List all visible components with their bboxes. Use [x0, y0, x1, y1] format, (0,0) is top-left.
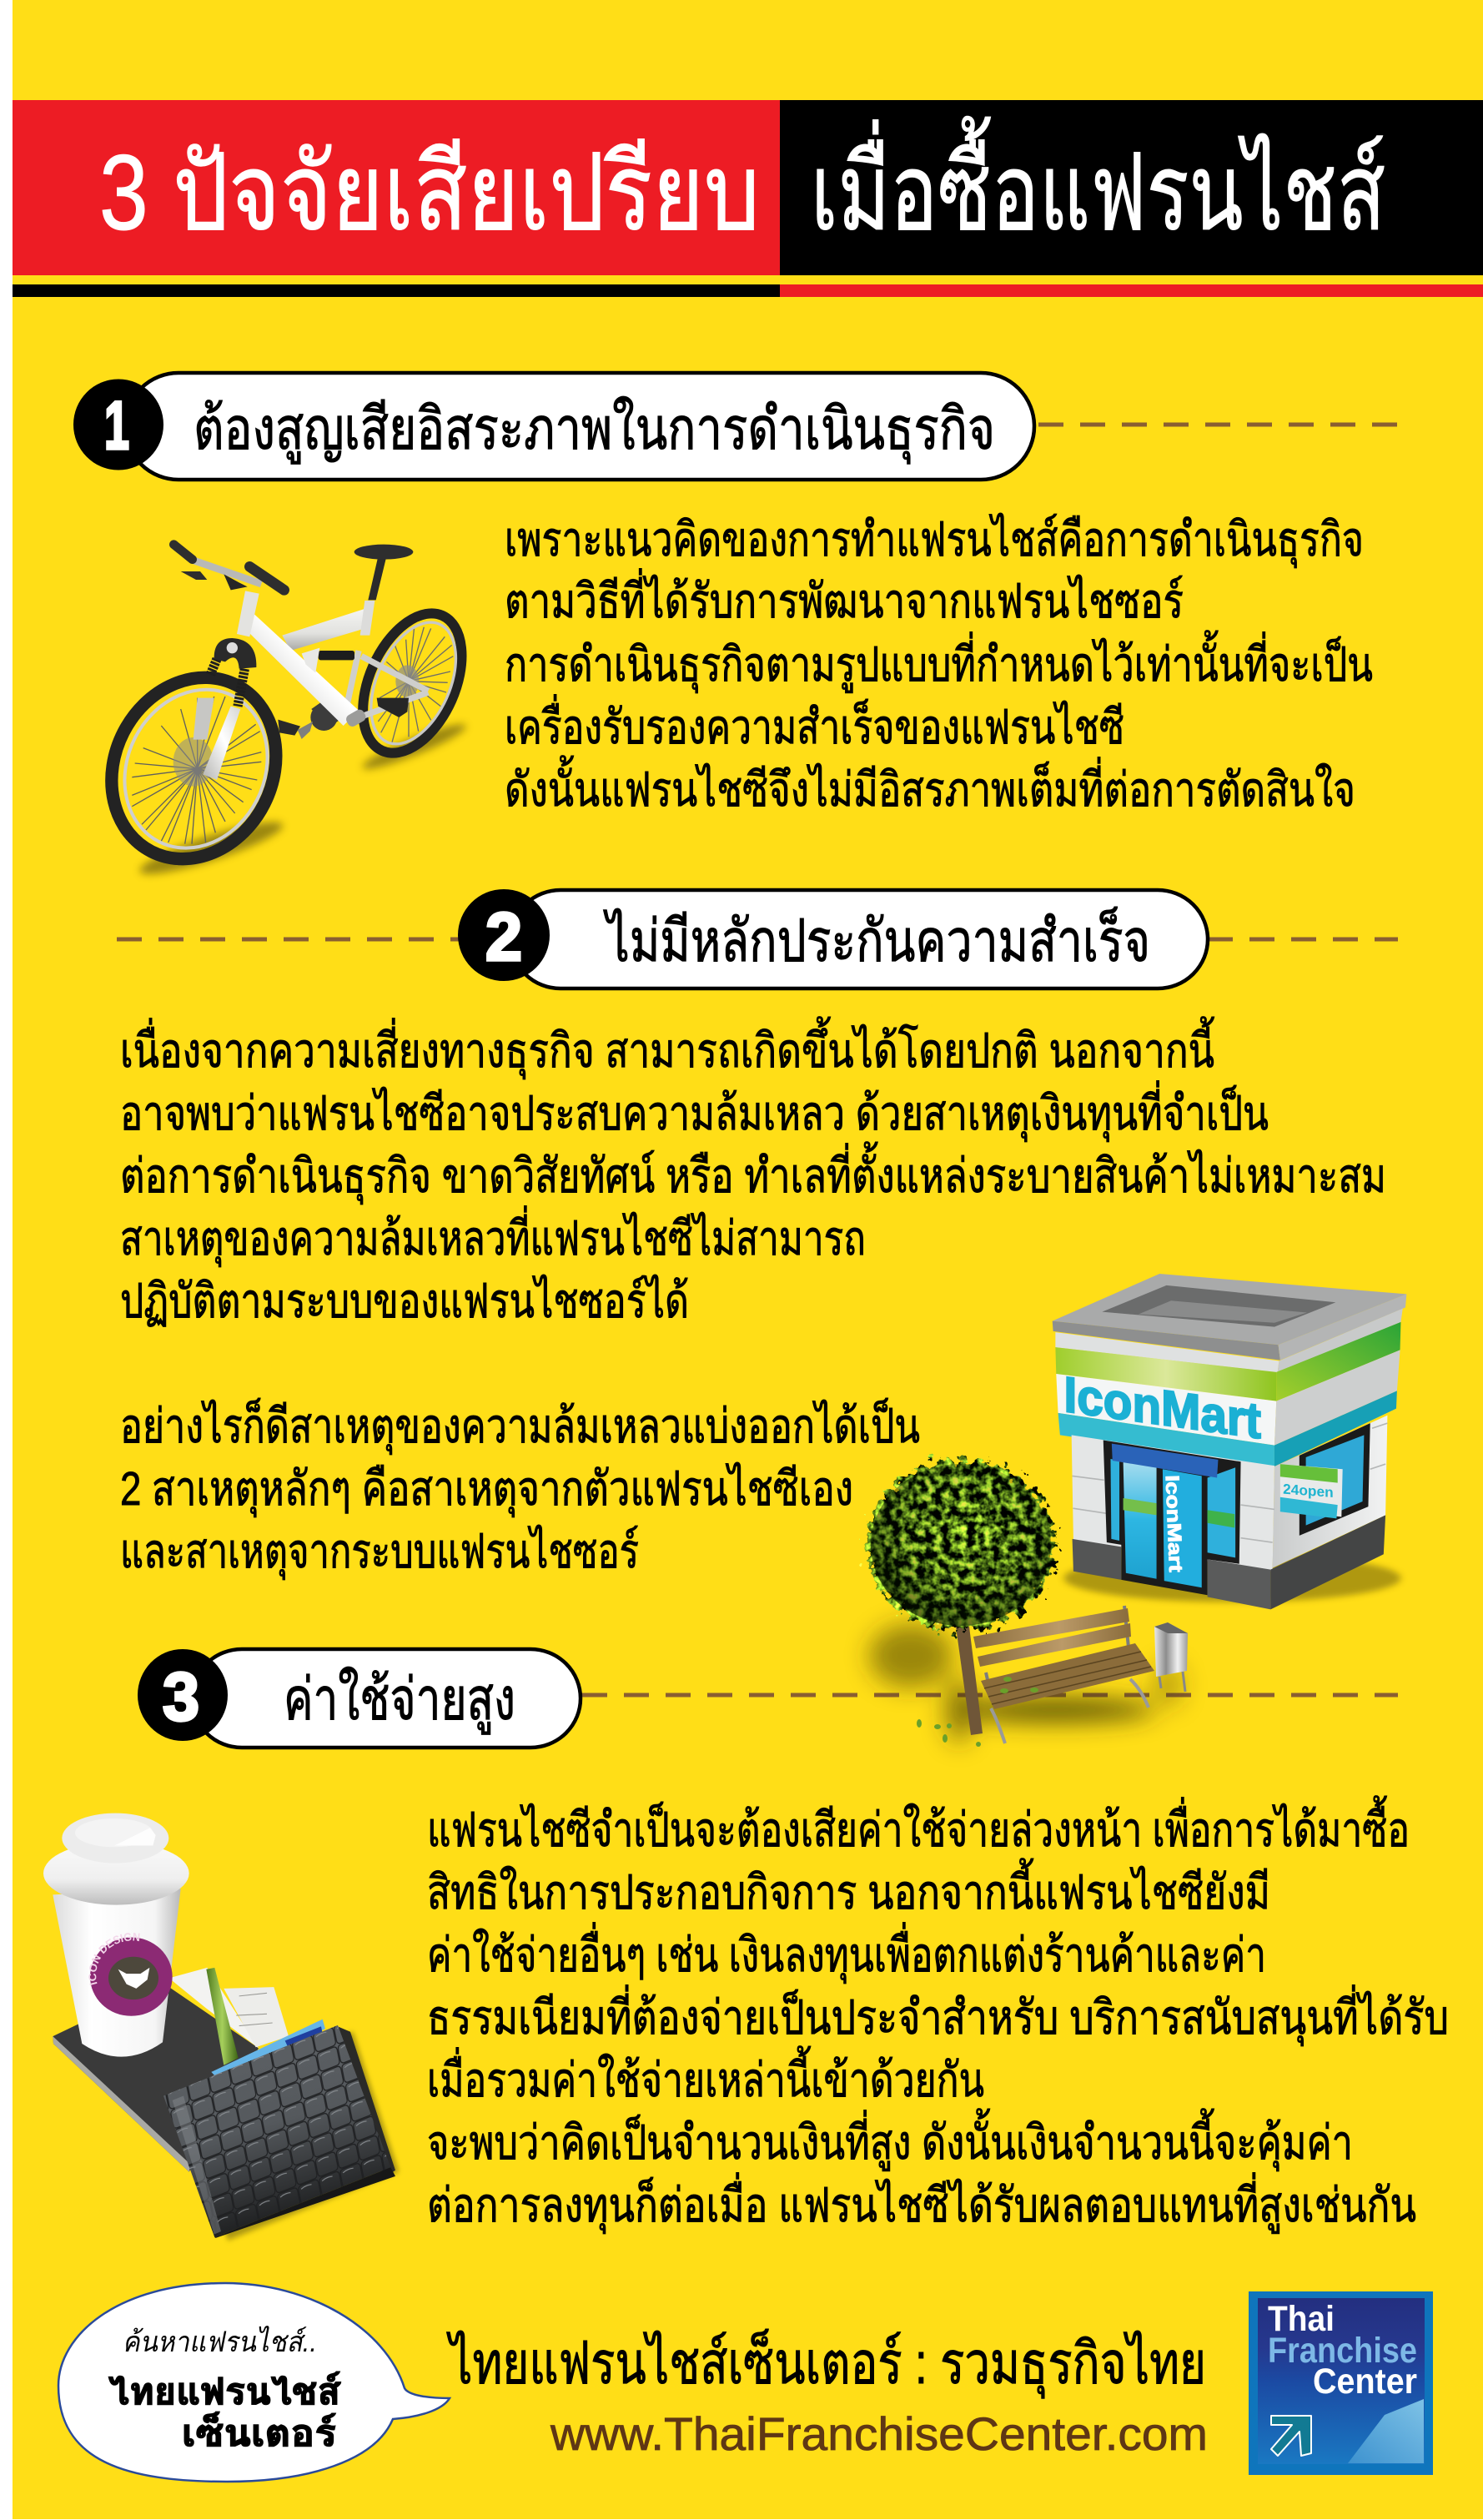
frame [248, 601, 428, 739]
heading 1: 1 [104, 388, 129, 464]
text block 2: และสาเหตุจากระบบแฟรนไชซอร์ [120, 1524, 639, 1581]
text block 2 [120, 1017, 1386, 1581]
tree foliage [867, 1459, 1055, 1631]
speech bubble [58, 2283, 450, 2482]
heading 1 [73, 373, 1034, 480]
litter bin [1154, 1622, 1188, 1692]
wallet [163, 2020, 395, 2238]
store walls [1072, 1416, 1387, 1572]
website url: www.ThaiFranchiseCenter.com [550, 2407, 1208, 2460]
store logo text: IconMart [1063, 1366, 1261, 1450]
door logo text: IconMart [1161, 1475, 1187, 1572]
text block 3: สิทธิในการประกอบกิจการ นอกจากนี้แฟรนไชซียังมี [427, 1859, 1270, 1919]
front wheel [81, 649, 307, 888]
text block 2: เนื่องจากความเสี่ยงทางธุรกิจ สามารถเกิดขึ้นได้โดยปกติ นอกจากนี้ [120, 1017, 1214, 1080]
papers and pen [169, 1968, 289, 2065]
store roof [1053, 1274, 1406, 1372]
illustration: convenience store [1053, 1274, 1406, 1609]
front fork [194, 638, 256, 780]
text block 3: เมื่อรวมค่าใช้จ่ายเหล่านี้เข้าด้วยกัน [427, 2046, 984, 2107]
cup [43, 1813, 189, 2057]
heading 2: 2 [485, 899, 522, 975]
illustration: coffee cup and wallet [43, 1813, 400, 2242]
tree trunk [956, 1627, 983, 1735]
text block 1: ตามวิธีที่ได้รับการพัฒนาจากแฟรนไชซอร์ [505, 568, 1184, 628]
text block 2: อย่างไรก็ดีสาเหตุของความล้มเหลวแบ่งออกได้เป็น [120, 1397, 920, 1456]
store sign fascia [1055, 1322, 1400, 1466]
logo: Thai Franchise Center: Franchise [1268, 2331, 1417, 2371]
tray [53, 1986, 259, 2172]
cup logo [88, 1933, 173, 2016]
heading 3: ค่าใช้จ่ายสูง [284, 1666, 515, 1735]
rear wheel [343, 598, 481, 768]
heading 2 [458, 889, 1208, 988]
fallen leaves [917, 1677, 1038, 1747]
text block 2: สาเหตุของความล้มเหลวที่แฟรนไชซีไม่สามารถ [120, 1205, 866, 1268]
logo: Thai Franchise Center: Thai [1268, 2299, 1335, 2339]
speech bubble: ค้นหาแฟรนไชส์.. [123, 2326, 317, 2358]
text block 3: ค่าใช้จ่ายอื่นๆ เช่น เงินลงทุนเพื่อตกแต่งร้านค้าและค่า [427, 1922, 1266, 1984]
handlebar and stem [173, 545, 284, 636]
logo: Thai Franchise Center [1249, 2291, 1433, 2475]
heading 1: ต้องสูญเสียอิสระภาพในการดำเนินธุรกิจ [194, 395, 995, 465]
bench [973, 1606, 1154, 1743]
speech bubble: ไทยแฟรนไชส์ [108, 2372, 341, 2412]
arrow icon [1271, 2416, 1311, 2456]
store right window [1300, 1423, 1370, 1536]
text block 2: 2 สาเหตุหลักๆ คือสาเหตุจากตัวแฟรนไชซีเอง [120, 1461, 853, 1518]
text block 2: ปฏิบัติตามระบบของแฟรนไชซอร์ได้ [120, 1274, 689, 1328]
store door [1103, 1441, 1241, 1595]
heading 3 [138, 1649, 581, 1748]
footer slogan: ไทยแฟรนไชส์เซ็นเตอร์ : รวมธุรกิจไทย [446, 2329, 1206, 2399]
logo: Thai Franchise Center: Center [1313, 2362, 1417, 2402]
text block 1 [505, 512, 1373, 817]
illustration: tree with bench and bin [867, 1459, 1188, 1747]
title banner: 3 ปัจจัยเสียเปรียบ [99, 133, 760, 253]
hanging sign 24open [1280, 1464, 1343, 1518]
cup logo: ICON DESIGN [88, 1933, 140, 1985]
title banner [13, 100, 1483, 297]
speech bubble: เซ็นเตอร์ [182, 2411, 336, 2454]
saddle [354, 545, 413, 600]
illustration: bicycle [81, 545, 481, 888]
heading 2: ไม่มีหลักประกันความสำเร็จ [603, 907, 1150, 973]
heading 3: 3 [163, 1659, 199, 1735]
store base [1073, 1515, 1385, 1609]
dashed connector lines [117, 425, 1398, 1695]
text block 1: เครื่องรับรองความสำเร็จของแฟรนไชซี [505, 694, 1124, 754]
text block 3 [427, 1796, 1449, 2235]
hanging sign 24open: 24open [1283, 1481, 1334, 1501]
